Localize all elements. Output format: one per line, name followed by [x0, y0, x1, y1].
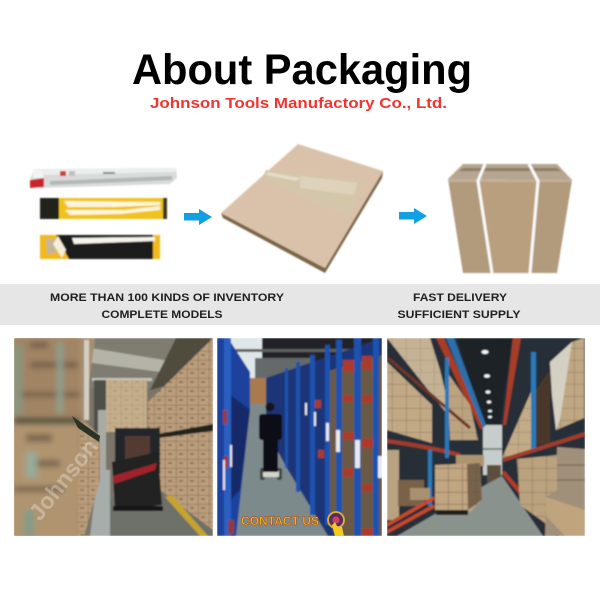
floor	[397, 476, 543, 536]
ceiling	[230, 338, 264, 380]
caption left: MORE THAN 100 KINDS OF INVENTORY	[50, 292, 284, 304]
right wall of cartons	[148, 338, 213, 532]
flat carton	[221, 144, 383, 273]
photo: forklift aisle	[14, 338, 213, 536]
carton top	[221, 144, 383, 268]
right rack steel	[503, 338, 521, 425]
carton edge	[221, 171, 383, 273]
far shelves	[250, 378, 266, 404]
white straps	[478, 164, 538, 273]
right beams	[503, 434, 585, 460]
strapped carton	[448, 164, 572, 273]
right rack	[266, 338, 382, 536]
left lower stack	[387, 450, 399, 520]
icon: yellow blade pack	[40, 198, 167, 219]
back stack	[106, 380, 147, 432]
product packs	[30, 168, 177, 259]
box front	[448, 179, 572, 273]
photo: blue racks	[217, 338, 382, 536]
aisle floor	[235, 404, 328, 536]
caption left	[50, 292, 284, 321]
icon: tap hand	[328, 512, 344, 536]
grey band	[0, 284, 600, 325]
photo: pallet warehouse	[387, 338, 585, 536]
caption left: COMPLETE MODELS	[102, 309, 223, 321]
left cartons upper	[387, 338, 446, 412]
box top	[448, 164, 572, 180]
hoverboard rider	[259, 402, 282, 480]
arrow 1	[184, 209, 212, 225]
right lower stacks	[517, 455, 557, 530]
contact us label: CONTACT US	[241, 516, 319, 528]
end wall	[483, 425, 502, 475]
left rack steel	[436, 338, 484, 430]
central pallet	[435, 463, 482, 512]
ceiling	[457, 338, 512, 425]
left rack	[217, 338, 250, 536]
subtitle: Johnson Tools Manufactory Co., Ltd.	[150, 95, 447, 112]
packing tape	[262, 170, 362, 216]
caption right	[398, 292, 521, 321]
caption right: SUFFICIENT SUPPLY	[398, 309, 521, 321]
floor	[106, 490, 213, 536]
title: About Packaging	[132, 47, 472, 94]
watermark: Johnson	[23, 434, 103, 525]
forklift	[115, 428, 160, 473]
left beams	[388, 358, 470, 428]
caption right: FAST DELIVERY	[413, 292, 507, 304]
right cartons upper	[502, 392, 531, 458]
ceiling	[90, 338, 175, 388]
icon: black and yellow blade pack	[40, 235, 160, 259]
left foreground stack	[14, 338, 100, 536]
icon: clear blade pack	[30, 168, 177, 188]
arrow 2	[399, 208, 427, 224]
